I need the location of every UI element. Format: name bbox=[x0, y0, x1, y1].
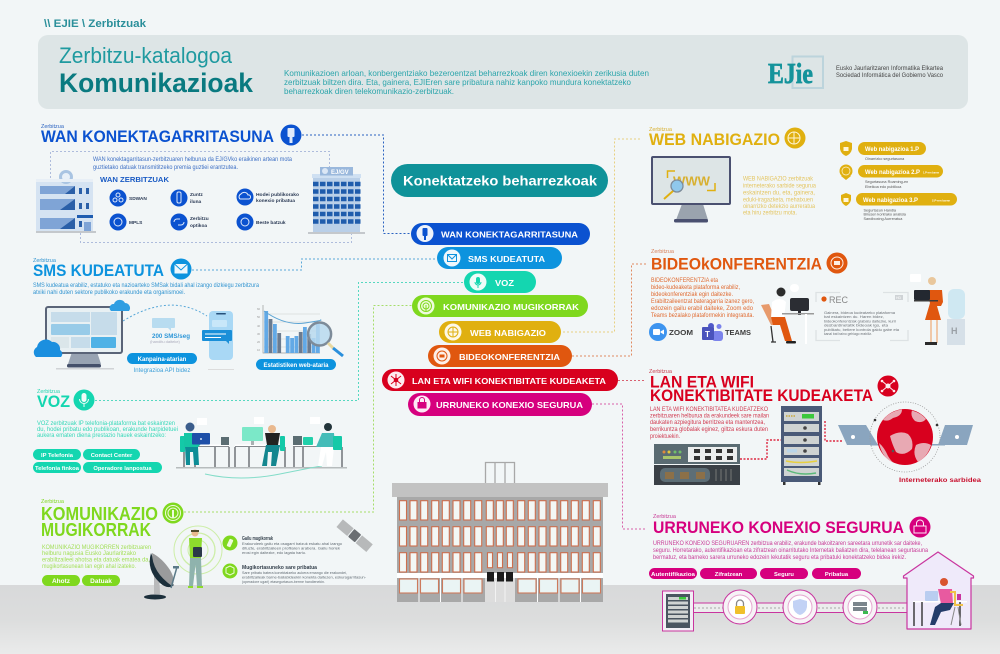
dashed SMS flow arc bbox=[123, 305, 207, 321]
WAN services heading: WAN ZERBITZUAK bbox=[100, 175, 170, 184]
illustration: satellite dish bbox=[144, 553, 179, 600]
pill: remote bbox=[408, 393, 592, 416]
campaign pill: Integrazioa API bidez bbox=[134, 368, 190, 374]
heading: Komunikazioak: Komunikazioak bbox=[59, 68, 254, 98]
remote label: Zerbitzua bbox=[653, 514, 677, 520]
panel: videoconference bbox=[649, 249, 965, 345]
pill: web: WEB NABIGAZIO bbox=[470, 328, 546, 338]
WAN service list: konexio pribatua bbox=[256, 198, 295, 204]
LAN heading: LAN ETA WIFI bbox=[650, 372, 754, 392]
chart: statistics: 10 bbox=[257, 348, 261, 352]
web level 1: Oinarrizko segurtasuna bbox=[865, 157, 905, 161]
REC frame: bideokonferentziak grabatu daitezke, kurri bbox=[824, 319, 896, 323]
campaign pill: Kanpaina-atarian bbox=[138, 357, 187, 363]
phone left bbox=[221, 437, 229, 445]
web level 3: Birusen kontrako analisia bbox=[864, 212, 907, 216]
secure tunnel bbox=[692, 603, 908, 612]
logo: EJIE bbox=[768, 56, 943, 90]
illustration: central building bbox=[392, 462, 608, 602]
SMS rate: (handitu daiteke) bbox=[150, 339, 181, 344]
illustration: web monitor: WWW bbox=[673, 174, 710, 188]
connector: LAN bbox=[618, 380, 646, 382]
server node bbox=[843, 590, 877, 624]
mobile description: mugikortasunean lan egin ahal izateko. bbox=[42, 563, 136, 570]
web level 3: Sandboxing Aurreratua bbox=[864, 217, 903, 221]
WAN service list: iluna bbox=[190, 199, 202, 205]
SMS description bbox=[33, 282, 259, 296]
rack in box bbox=[662, 591, 694, 631]
illustration: phone bbox=[202, 311, 234, 370]
web level 2: Web nabigazioa 2.P bbox=[865, 170, 920, 176]
statistics pill: Estatistiken web-ataria bbox=[263, 363, 329, 369]
campaign pill bbox=[127, 353, 197, 374]
icon: globe bbox=[784, 128, 806, 148]
chart: statistics: 30 bbox=[257, 332, 261, 336]
remote pills bbox=[649, 568, 861, 579]
WAN heading: WAN KONEKTAGARRITASUNA bbox=[41, 127, 274, 146]
web level 3: 2.P-ren barne bbox=[932, 198, 950, 202]
LAN description: berrikuntza globalak eginez, giltza eskura duten bbox=[650, 426, 768, 433]
pill: LAN bbox=[382, 369, 618, 391]
VOZ description: du, hodei pribatu edo publikoan, erakunde harpidetuei bbox=[37, 426, 178, 433]
logo: Teams: TEAMS bbox=[725, 328, 751, 337]
illustration: call centre bbox=[176, 417, 347, 478]
VOZ pills bbox=[33, 449, 162, 473]
mobile private network: Mugikortasuneko sare pribatua bbox=[242, 565, 317, 571]
SMS description: SMS kudeatua erabiliz, estatuko eta nazioarteko SMSak bidali ahal izango dizkiegu zerbitzura bbox=[33, 282, 259, 289]
pill: WAN bbox=[411, 223, 590, 245]
connector: video bbox=[572, 264, 646, 356]
connector: mobile bbox=[184, 306, 412, 512]
remote pills: Seguru bbox=[774, 572, 794, 578]
web description: eta hiru zerbitzu mota. bbox=[743, 210, 797, 217]
panel: web browsing bbox=[649, 127, 957, 222]
WAN description bbox=[93, 156, 292, 171]
connector: remote bbox=[592, 404, 646, 529]
LAN description: zerbitzuaren helburua da erakundeek sare mailan bbox=[650, 413, 769, 420]
web heading: WEB NABIGAZIO bbox=[649, 130, 780, 149]
web level 2 bbox=[840, 164, 943, 189]
video description: BIDEOKONFERENTZIA eta bbox=[651, 277, 718, 284]
video description: Teams bezalako plataformekin integratuta. bbox=[651, 312, 754, 319]
pill: LAN: LAN ETA WIFI KONEKTIBITATE KUDEAKETA bbox=[412, 376, 606, 386]
mobile pills bbox=[42, 575, 120, 586]
header description: Komunikazioen arloan, konbergentziako bezeroentzat beharrezkoak diren konexioekin zerikusia duten bbox=[284, 69, 649, 78]
icon: padlock bbox=[910, 516, 930, 538]
video description bbox=[651, 277, 754, 319]
web label: Zerbitzua bbox=[649, 127, 673, 133]
logo: Zoom bbox=[649, 323, 693, 341]
icon: microphone bbox=[74, 390, 94, 410]
video heading: BIDEOkONFERENTZIA bbox=[651, 254, 822, 274]
illustration: person at desk bbox=[761, 284, 814, 344]
central heading: Konektatzeko beharrezkoak bbox=[403, 172, 597, 188]
breadcrumb: \\ EJIE \ Zerbitzuak bbox=[44, 18, 147, 30]
mobile device service bbox=[222, 536, 342, 555]
chart: statistics: 20 bbox=[257, 340, 261, 344]
web level 1 bbox=[840, 141, 926, 161]
header description bbox=[284, 69, 649, 96]
mobile pills: Datuak bbox=[90, 578, 112, 585]
shield node bbox=[783, 590, 817, 624]
mobile device service: erosi egin daitezke, edo lagata hartu. bbox=[242, 551, 306, 555]
mobile private network: Sare pribatu batera konektatzeko aukera emango die erakundei, bbox=[242, 571, 347, 575]
padlock node bbox=[723, 590, 757, 624]
web level 2: Ebeikoa edo publikoa bbox=[865, 185, 902, 189]
WAN service list: optikoa bbox=[190, 223, 207, 229]
right building: EJ/GV bbox=[308, 167, 365, 234]
illustration: water cooler bbox=[947, 289, 965, 345]
pill: WAN: WAN KONEKTAGARRITASUNA bbox=[441, 230, 578, 240]
panel: header bbox=[38, 35, 968, 109]
central heading bbox=[391, 164, 608, 197]
REC frame: Gainera, bideoa kudeatzeko plataforma bbox=[824, 311, 896, 315]
REC frame: bat eskaintzen du. Haren bidez, bbox=[824, 315, 884, 319]
agent right bbox=[303, 423, 342, 466]
panel: VOZ bbox=[33, 389, 347, 478]
illustration: standing woman bbox=[910, 274, 943, 345]
REC frame bbox=[816, 292, 908, 340]
pill: VOZ bbox=[464, 271, 536, 293]
web level 3: Web nabigazioa 3.P bbox=[863, 198, 918, 204]
panel: secure remote connection bbox=[649, 514, 974, 631]
SMS rate: 200 SMS/seg bbox=[152, 333, 190, 340]
LAN description: LAN ETA WIFI KONEKTIBITATEA KUDEATZEKO bbox=[650, 406, 768, 413]
REC frame: REC bbox=[829, 295, 849, 305]
illustration: monitor with clouds bbox=[34, 300, 130, 370]
VOZ description: VOZ zerbitzuak IP telefonia-plataforma bat eskaintzen bbox=[37, 420, 175, 427]
logo: EJIE: Sociedad Informática del Gobierno Vasco bbox=[836, 72, 943, 79]
web level 1: Web nabigazioa 1.P bbox=[865, 147, 919, 153]
WAN service list bbox=[110, 188, 299, 230]
heading: catalogue: Zerbitzu-katalogoa bbox=[59, 43, 233, 68]
video description: edozein gailu erabil daiteke, Zoom edo bbox=[651, 305, 753, 312]
pill: mobile: KOMUNIKAZIO MUGIKORRAK bbox=[443, 302, 580, 312]
header description: zerbitzuak biltzen dira. Eta, gainera, EJIEren sare pribatura nahiz kanpoko mundura konektatzeko bbox=[284, 78, 631, 87]
remote pills: Zifratzean bbox=[715, 572, 743, 578]
chart: statistics: 60 bbox=[257, 307, 261, 311]
header description: beharrezkoak diren telekomunikazio-zerbitzuak. bbox=[284, 87, 454, 96]
WAN description: guztietako datuak transmititzeko premia guztiei erantzutea. bbox=[93, 164, 238, 171]
web description: WEB NABIGAZIO zerbitzuak bbox=[743, 176, 814, 182]
pill: SMS: SMS KUDEATUTA bbox=[468, 254, 545, 264]
remote pills: Autentifikazioa bbox=[651, 572, 696, 578]
logo: EJIE: EJie bbox=[768, 58, 813, 90]
icon: cable bbox=[280, 124, 302, 146]
WAN service list: Beste batzuk bbox=[256, 220, 286, 226]
mobile description bbox=[42, 544, 151, 570]
dashed network outline bbox=[50, 152, 352, 242]
mobile description: helburu nagusia Eusko Jaurlaritzako bbox=[42, 550, 136, 557]
left building bbox=[36, 170, 96, 233]
mobile heading: MUGIKORRAK bbox=[41, 520, 151, 540]
remote description: seguru. Horretarako, autentifikazioan eta zifratzean oinarritutako Internetak baliatzen dira, telelanean segurtasuna bbox=[653, 547, 928, 554]
icon: envelope bbox=[170, 258, 192, 280]
mobile heading bbox=[41, 504, 158, 540]
LAN label: Zerbitzua bbox=[649, 369, 673, 375]
panel: mobile communications bbox=[41, 499, 373, 600]
video description: Erabiltzaileentzat bateragarria izanez gero, bbox=[651, 298, 754, 305]
remote pills: Pribatua bbox=[825, 572, 849, 578]
phone right bbox=[293, 436, 302, 445]
SMS rate bbox=[150, 318, 190, 344]
video description: bideo-kudeaketa plataforma erabiliz, bbox=[651, 284, 740, 291]
remote description bbox=[653, 540, 928, 561]
LAN description: daukaten azpiegitura berritzea eta mantentzea, bbox=[650, 419, 765, 426]
logo: Teams: T bbox=[705, 330, 710, 339]
WAN service list: SDWAN bbox=[129, 196, 147, 202]
connector: web bbox=[561, 139, 640, 332]
house with remote worker bbox=[904, 552, 974, 629]
pill: mobile bbox=[412, 295, 588, 317]
chart: statistics: 40 bbox=[257, 324, 261, 328]
video label: Zerbitzua bbox=[651, 249, 675, 255]
LAN description bbox=[650, 406, 769, 440]
REC frame: desbardinetatik bideoak igo, eta bbox=[824, 324, 889, 328]
panel: WAN bbox=[36, 124, 365, 242]
illustration: water cooler: H bbox=[951, 326, 958, 336]
illustration: person with phone bbox=[174, 526, 222, 588]
mobile private network: erabiltzaileak barne-baliabideekin konekta daitezen, eskuragarritasun- bbox=[242, 576, 367, 580]
web description: oinarrizko detekzio aurreratua bbox=[743, 203, 815, 210]
VOZ pills: Operadore lanpostua bbox=[93, 466, 152, 472]
web level 2: 1.P-ren barne bbox=[923, 170, 939, 174]
LAN heading: KONEKTIBITATE KUDEAKETA bbox=[650, 386, 873, 405]
icon: network bbox=[878, 376, 898, 396]
pill: VOZ: VOZ bbox=[495, 278, 514, 288]
LAN description: proiektuekin. bbox=[650, 433, 680, 440]
panel: SMS bbox=[33, 258, 343, 374]
web level 3: Segurtasun Handia bbox=[864, 208, 897, 212]
icon: video bubble bbox=[826, 252, 848, 274]
mobile description: KOMUNIKAZIO MUGIKORREN zerbitzuaren bbox=[42, 544, 151, 551]
WAN service list: Hodei publikorako bbox=[256, 192, 299, 198]
logo: Zoom: ZOOM bbox=[669, 328, 693, 337]
ground band bbox=[0, 585, 1000, 654]
illustration: web monitor bbox=[652, 157, 730, 222]
web description: eskaintzen du, eta, gainera, bbox=[743, 190, 815, 196]
WAN service list: Zuntz bbox=[190, 192, 203, 198]
web level 2: Segurtasuna Roaming-en bbox=[865, 180, 908, 184]
REC frame: kanal bat baino gehiago erabiliz. bbox=[824, 332, 872, 336]
mobile device service: Erakundeek gailu eta osagarri batzuk eskatu ahal izango bbox=[242, 542, 342, 546]
right building: EJ/GV: EJ/GV bbox=[331, 170, 349, 176]
WAN service list: MPLS bbox=[129, 220, 143, 226]
illustration: laptops and globe bbox=[838, 402, 973, 472]
VOZ heading: VOZ bbox=[37, 392, 70, 411]
pill: video: BIDEOKONFERENTZIA bbox=[459, 352, 560, 362]
mobile pills: Ahotz bbox=[52, 578, 71, 585]
pill: video bbox=[428, 345, 572, 367]
mobile description: erabiltzaileei ahotsa eta datuak ematea da, bbox=[42, 556, 150, 564]
panel: central stack bbox=[382, 164, 618, 416]
remote description: bermatuz, eta barneko sarera urruneko edozein lekutatik seguru eta pribatuki konektatzeko bidea irekiz. bbox=[653, 554, 906, 561]
mobile heading: KOMUNIKAZIO bbox=[41, 504, 158, 524]
statistics pill bbox=[256, 359, 336, 370]
SMS description: atxiki nahi duten sektore publikoko erakunde eta organismoei. bbox=[33, 289, 185, 296]
remote description: URRUNEKO KONEXIO SEGURUAREN zerbitzua erabiliz, erakunde bakoitzaren sareetara urrunetik sar daiteke, bbox=[653, 540, 922, 547]
video description: bideokonferentziak egin daitezke. bbox=[651, 291, 733, 298]
WAN service list: Zerbitzu bbox=[190, 216, 209, 222]
mobile private network bbox=[222, 564, 367, 584]
agent middle bbox=[242, 425, 285, 466]
SMS heading: SMS KUDEATUTA bbox=[33, 261, 164, 280]
connector: WAN bbox=[302, 135, 411, 234]
panel: LAN and WiFi bbox=[649, 369, 981, 485]
chart: statistics bbox=[257, 305, 343, 356]
illustration: switch bbox=[654, 444, 740, 485]
pill: web bbox=[439, 321, 561, 343]
mobile label: Zerbitzua bbox=[41, 499, 65, 505]
VOZ description bbox=[37, 420, 178, 439]
logo: Teams bbox=[702, 323, 751, 341]
internet access label: Interneterako sarbidea bbox=[899, 477, 981, 484]
icon: signal bbox=[162, 502, 184, 524]
mobile private network: (operadore ugari) etasegurtasun-berme handienekin. bbox=[242, 580, 325, 584]
icon: satellite bbox=[336, 519, 373, 552]
connector: VOZ bbox=[95, 282, 464, 400]
VOZ pills: Telefonia finkoa bbox=[35, 466, 80, 472]
agent left bbox=[180, 422, 210, 465]
pill: remote: URRUNEKO KONEXIO SEGURUA bbox=[436, 400, 583, 410]
web description bbox=[743, 176, 816, 217]
remote heading: URRUNEKO KONEXIO SEGURUA bbox=[653, 518, 904, 537]
WAN label: Zerbitzua bbox=[41, 124, 65, 130]
mobile device service: dituzte, erabiltzaileen profilaren arabera. Gailu horiek bbox=[242, 546, 340, 550]
web description: interneterako sarbide segurua bbox=[743, 182, 816, 190]
VOZ pills: Contact Center bbox=[91, 453, 133, 459]
speech bubbles bbox=[197, 417, 320, 425]
pill: SMS bbox=[437, 247, 562, 269]
VOZ description: aukera ematen diena prestazio hauek eskaintzeko: bbox=[37, 432, 166, 439]
LAN heading bbox=[650, 372, 873, 405]
VOZ label: Zerbitzua bbox=[37, 389, 61, 395]
VOZ pills: IP Telefonia bbox=[41, 453, 74, 459]
red links bbox=[740, 421, 842, 459]
connector: SMS bbox=[192, 259, 437, 270]
illustration: server rack bbox=[781, 406, 822, 485]
mobile device service: Gailu mugikorrak bbox=[242, 536, 273, 542]
web description: eduki-iragazketa, mehatxuen bbox=[743, 196, 813, 203]
SMS label: Zerbitzua bbox=[33, 258, 57, 264]
REC frame: publikatu, betiere kontrola galdu gabe eta bbox=[824, 328, 900, 332]
chart: statistics: 50 bbox=[257, 315, 261, 319]
REC frame: HD bbox=[896, 296, 902, 300]
web level 3 bbox=[841, 193, 957, 221]
WAN description: WAN konektagarritasun-zerbitzuaren helburua da EJ/GVko eraikinen artean mota bbox=[93, 156, 292, 163]
logo: EJIE: Eusko Jaurlaritzaren Informatika Elkartea bbox=[836, 65, 943, 72]
